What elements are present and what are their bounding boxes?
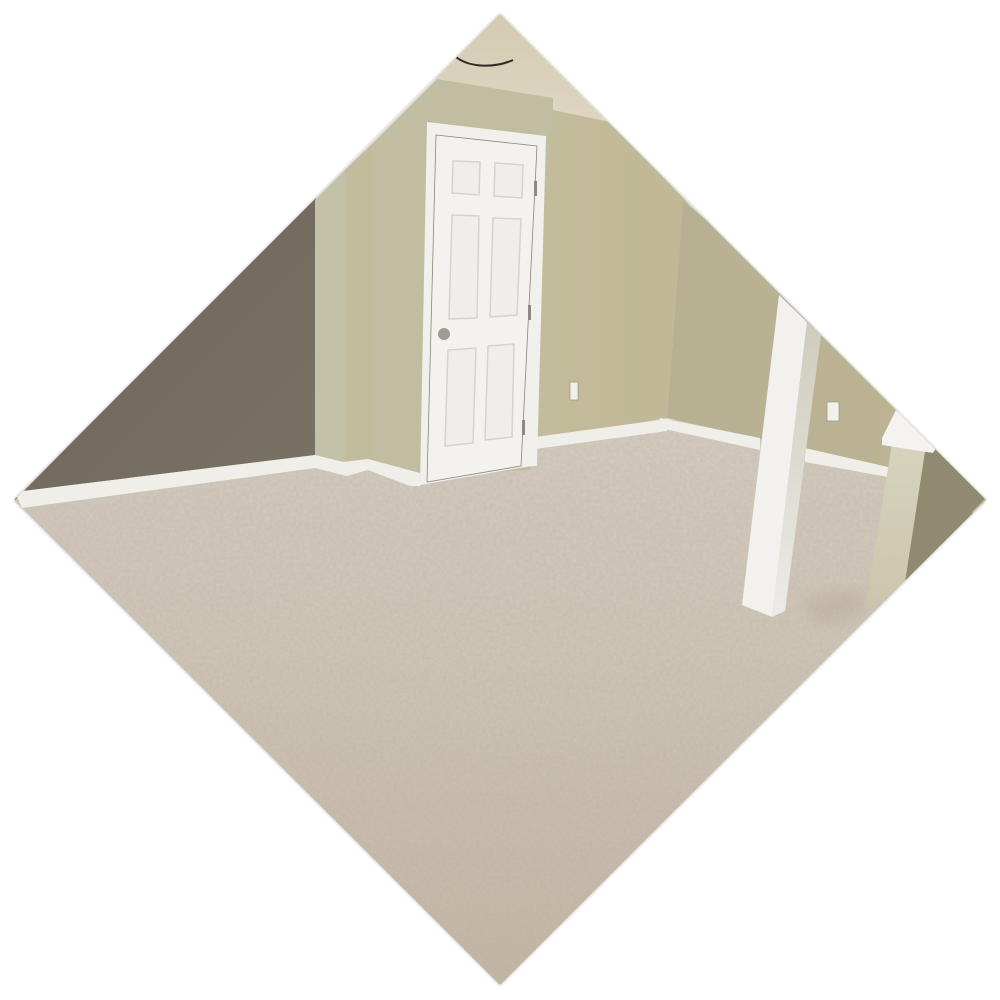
- pillar left face: [315, 170, 345, 462]
- hinges: [534, 181, 537, 196]
- door: [427, 135, 537, 482]
- stair half wall: [865, 410, 990, 612]
- outlet right wall: [827, 402, 839, 421]
- outlet back wall: [570, 382, 578, 400]
- dark left wall: [15, 195, 316, 500]
- carpet floor: [0, 420, 1000, 1000]
- pillar middle face: [345, 143, 373, 462]
- door knob: [438, 328, 450, 340]
- carpet shadow near post: [806, 590, 862, 622]
- door frame: [420, 122, 546, 485]
- ceiling: [436, 14, 608, 122]
- pillar front wall: [373, 79, 553, 476]
- baseboards: [15, 418, 888, 508]
- ceiling wire: [456, 57, 513, 66]
- white post: [742, 295, 821, 617]
- back wall: [553, 110, 690, 434]
- door panels: [445, 161, 523, 446]
- right wall: [667, 200, 900, 468]
